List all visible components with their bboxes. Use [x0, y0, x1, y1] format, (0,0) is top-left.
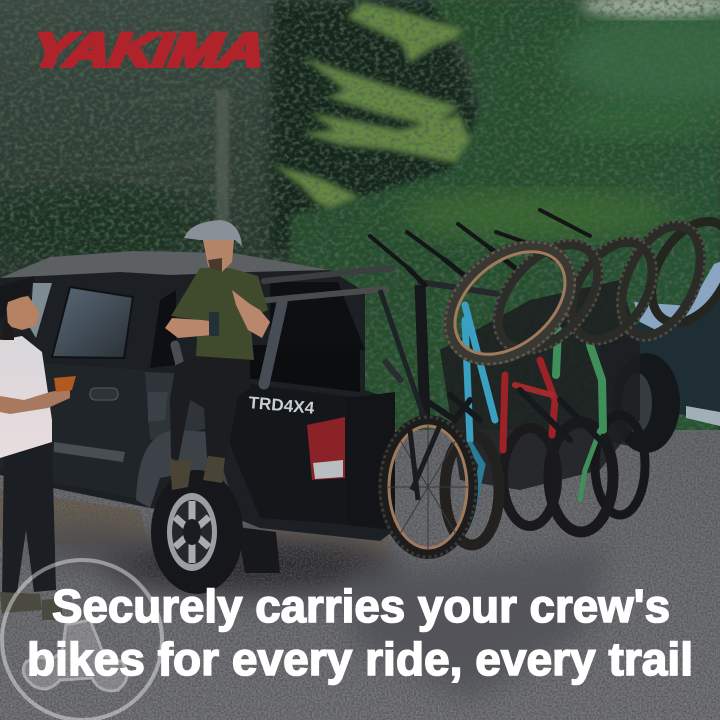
headline text: bikes for every ride, every trail: [27, 633, 693, 685]
truck front window: [30, 283, 52, 338]
tail light: [307, 417, 345, 480]
left person helmet: [0, 276, 35, 320]
man arms: [165, 318, 216, 338]
dark mass of bike frames: [440, 280, 640, 490]
man shirt: [171, 268, 268, 360]
front wheel: [151, 470, 243, 594]
main fir tree: [290, 0, 720, 440]
icon: circular bike-link watermark: [2, 560, 162, 720]
left person pants: [2, 442, 56, 600]
bike 2 rear wheel: [445, 435, 499, 545]
left person shirt: [0, 336, 52, 458]
truck bed: [228, 383, 353, 525]
sunlit branches: [273, 2, 470, 208]
icon: second vehicle wheel: [612, 353, 680, 453]
left person shoes: [0, 592, 62, 620]
second vehicle at right: [600, 262, 720, 453]
logo: Yakima wordmark: ®: [265, 34, 269, 41]
man helmet: [184, 220, 242, 246]
door handle: [90, 388, 118, 400]
truck rear cab window: [270, 282, 365, 352]
background: forest: [0, 0, 720, 440]
bike 5 rear wheel: [595, 415, 645, 515]
bike 2 front wheel: [473, 220, 623, 374]
mud flap: [237, 527, 280, 573]
bike rack post: [380, 285, 425, 420]
person: seated man: [165, 220, 270, 490]
left person head: [6, 296, 40, 330]
bike 4 front wheel: [600, 208, 720, 354]
bike 5 front wheel: [635, 207, 720, 337]
distant tree trunk: [110, 90, 229, 225]
logo: Yakima wordmark: YAKIMA: [23, 25, 276, 77]
truck body: [0, 251, 395, 541]
left person arm: [0, 388, 70, 414]
roof rack: [175, 268, 392, 385]
bike 3 front wheel: [549, 222, 675, 360]
ground: gravel: [0, 430, 720, 720]
man head: [203, 240, 234, 272]
mirror and lights on fender: [148, 392, 168, 422]
left person snack: [54, 376, 76, 392]
rear bike wheels: [445, 415, 645, 545]
dark gap behind tree branches: [270, 0, 500, 250]
truck side gap: [150, 290, 176, 368]
pickup truck: [0, 251, 395, 594]
left lower foliage: [0, 189, 210, 261]
truck door window: [52, 287, 133, 358]
bike 3 rear wheel: [503, 428, 557, 526]
person: left standing: [0, 276, 76, 620]
headline text: Securely carries your crew's: [52, 580, 670, 632]
front bike rear wheel: [380, 417, 476, 557]
top bike wheels: [421, 207, 720, 389]
headline text: [27, 580, 693, 685]
tailgate: [346, 392, 395, 530]
man boots: [170, 456, 225, 490]
man legs: [170, 352, 250, 462]
bike 4 rear wheel: [549, 422, 613, 532]
bike 1 front wheel: [421, 217, 599, 389]
wheel arch: [136, 430, 240, 525]
bike frames: [370, 210, 610, 520]
TRD badge: TRD4X4: [248, 393, 316, 418]
